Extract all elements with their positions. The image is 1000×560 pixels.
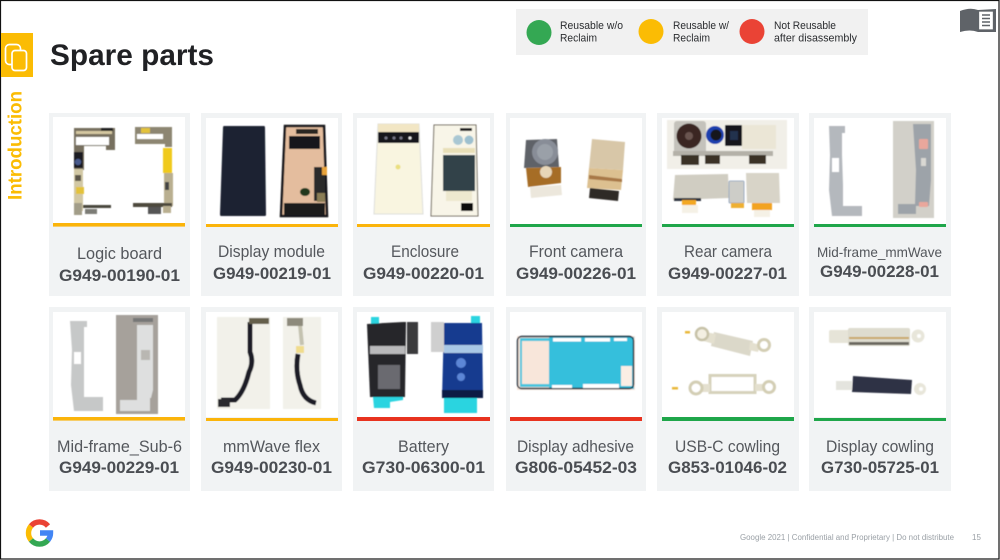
label: Display module: Display module: [218, 242, 325, 261]
label: Display cowling: Display cowling: [826, 437, 934, 456]
label: USB-C cowling: [668, 437, 787, 477]
footer text: Google 2021 | Confidential and Proprietary | Do not distribute: [740, 533, 955, 542]
label: Display module: [213, 242, 331, 283]
photo: mmWave flex: [217, 317, 321, 409]
label: Mid-frame_mmWave: Mid-frame_mmWave: [817, 244, 942, 260]
card: Display module: [201, 113, 342, 296]
icon: Google G logo: [28, 522, 51, 544]
label: mmWave flex: G949-00230-01: [211, 458, 332, 477]
label: USB-C cowling: USB-C cowling: [675, 437, 780, 456]
legend item: reusable with reclaim: Reusable w/: [673, 20, 730, 32]
legend item: not reusable: [740, 19, 857, 44]
label: Display adhesive: G806-05452-03: [515, 458, 637, 477]
card: Mid-frame_Sub-6: [49, 307, 190, 491]
label: mmWave flex: mmWave flex: [223, 437, 320, 456]
legend item: not reusable: Not Reusable: [774, 20, 836, 32]
card: Rear camera: [657, 113, 799, 296]
title: Spare parts: [50, 39, 214, 72]
legend item: reusable without reclaim: Reusable w/o: [560, 20, 623, 32]
label: Logic board: G949-00190-01: [59, 266, 180, 285]
label: Display module: G949-00219-01: [213, 264, 331, 283]
label: Enclosure: [363, 242, 484, 283]
photo: front camera: [524, 139, 625, 201]
label: Display cowling: [821, 437, 939, 477]
label: Logic board: [59, 244, 180, 285]
card: Display adhesive: [506, 307, 646, 491]
label: Enclosure: Enclosure: [391, 242, 459, 261]
label: USB-C cowling: G853-01046-02: [668, 458, 787, 477]
card: Battery: [353, 307, 494, 491]
label: Mid-frame_mmWave: [817, 244, 942, 281]
label: Display adhesive: Display adhesive: [517, 437, 634, 456]
photo: USB-C cowling: [672, 328, 774, 394]
legend item: not reusable: after disassembly: [774, 32, 857, 44]
label: Battery: G730-06300-01: [362, 458, 485, 477]
photo: display module: [220, 126, 327, 216]
label: Mid-frame_mmWave: G949-00228-01: [820, 262, 939, 281]
card: USB-C cowling: [657, 307, 799, 491]
label: mmWave flex: [211, 437, 332, 477]
photo: mid-frame Sub-6: [70, 315, 158, 414]
photo: rear camera: [667, 120, 787, 217]
label: Mid-frame_Sub-6: [57, 437, 182, 477]
label: Rear camera: G949-00227-01: [668, 264, 787, 283]
card: Front camera: [506, 113, 646, 296]
icon: book: [960, 9, 996, 32]
legend item: reusable with reclaim: [638, 19, 730, 44]
legend item: reusable with reclaim: Reclaim: [673, 32, 710, 44]
label: Mid-frame_Sub-6: Mid-frame_Sub-6: [57, 437, 182, 456]
label: Logic board: Logic board: [77, 244, 162, 263]
photo: display adhesive: [517, 336, 635, 390]
card: Mid-frame_mmWave: [809, 113, 951, 296]
card: Enclosure: [353, 113, 494, 296]
label: Mid-frame_Sub-6: G949-00229-01: [59, 458, 179, 477]
card: mmWave flex: [201, 307, 342, 491]
label: Rear camera: [668, 242, 787, 283]
label: Battery: Battery: [398, 437, 449, 456]
legend item: reusable without reclaim: [526, 20, 623, 45]
card: Display cowling: [809, 307, 951, 491]
page number: 15: [972, 533, 981, 542]
photo: logic board: [74, 127, 173, 215]
section label: Introduction: Introduction: [6, 91, 26, 200]
photo: mid-frame mmWave: [829, 121, 934, 218]
legend: [516, 9, 868, 55]
section tab icon: [1, 33, 33, 77]
legend item: reusable without reclaim: Reclaim: [560, 32, 597, 44]
label: Front camera: Front camera: [529, 242, 624, 261]
label: Display adhesive: [515, 437, 637, 477]
label: Front camera: G949-00226-01: [516, 264, 636, 283]
label: Rear camera: Rear camera: [684, 242, 772, 261]
label: Front camera: [516, 242, 636, 283]
label: Battery: [362, 437, 485, 477]
card: Logic board: [49, 113, 190, 296]
photo: battery: [367, 316, 483, 413]
photo: display cowling: [829, 328, 926, 395]
label: Display cowling: G730-05725-01: [821, 458, 939, 477]
photo: enclosure: [374, 124, 478, 216]
label: Enclosure: G949-00220-01: [363, 264, 484, 283]
